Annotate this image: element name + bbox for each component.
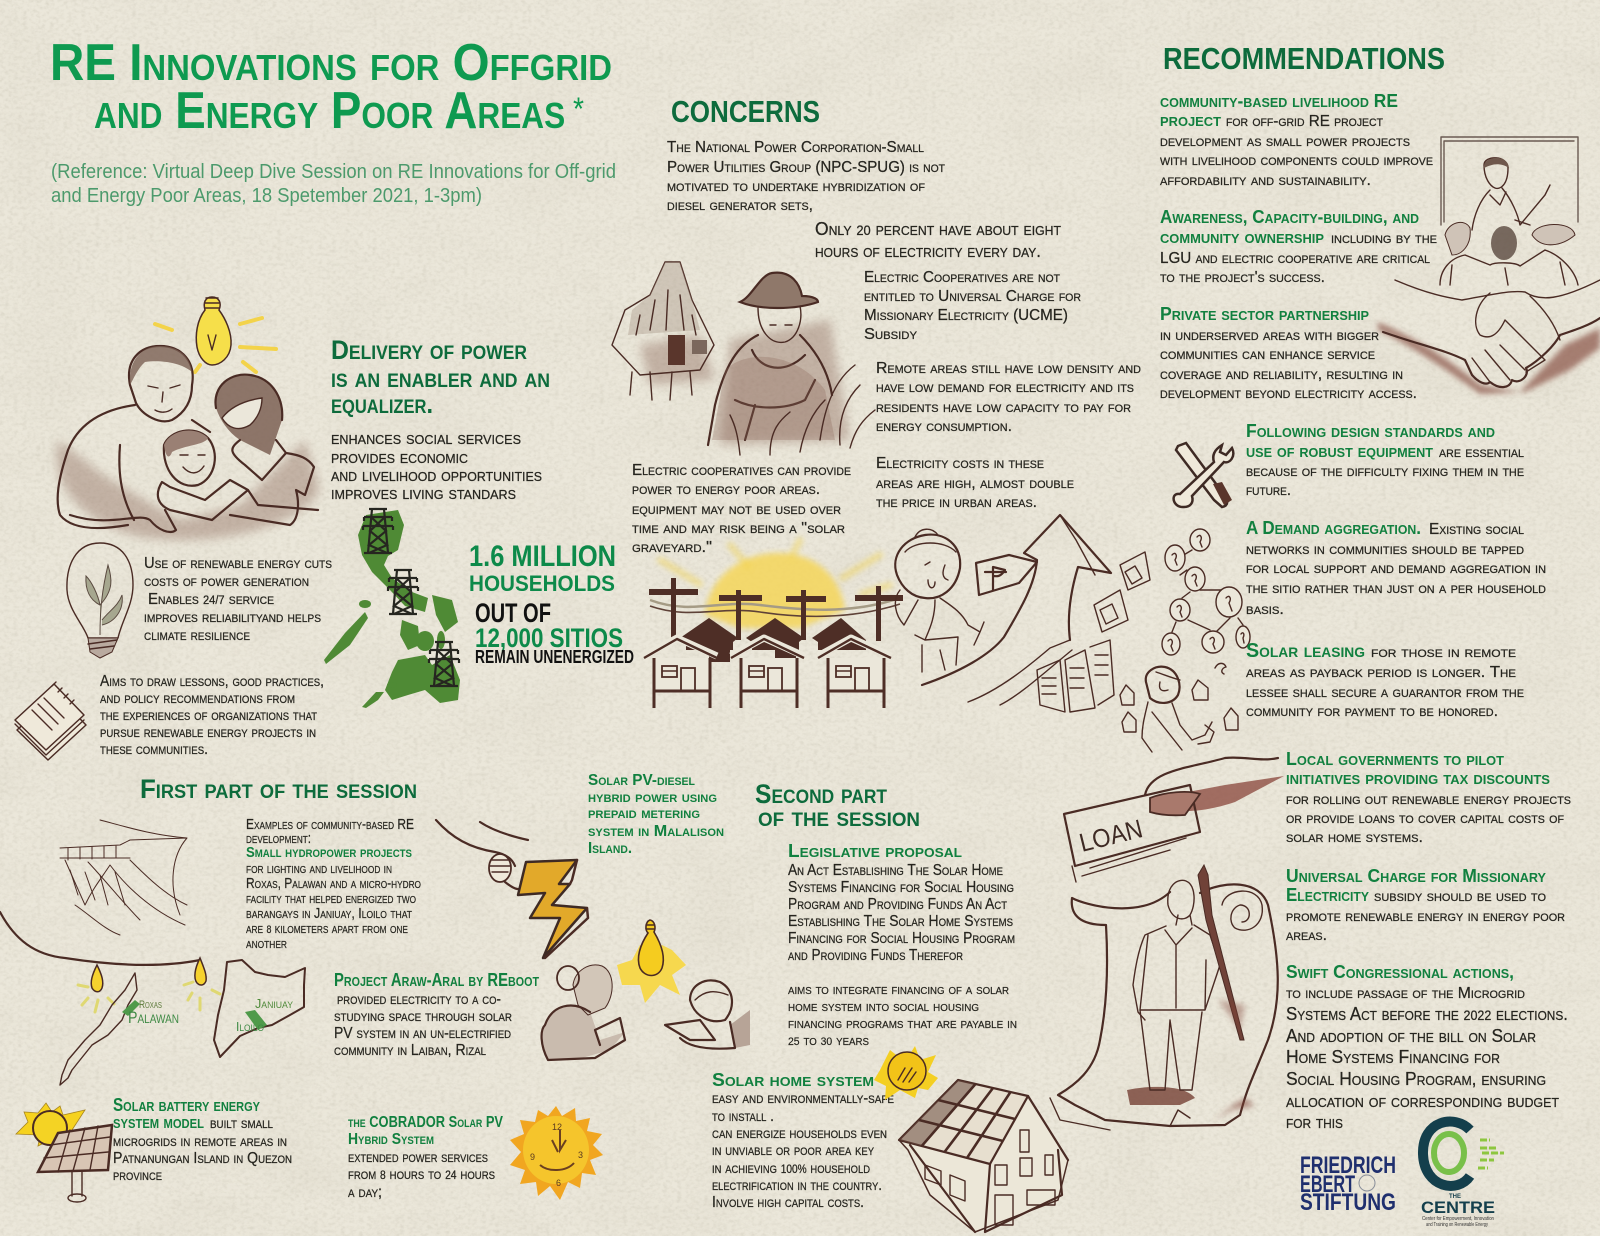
text: COBRADOR solar PV	[348, 1114, 503, 1201]
text: NPC-SPUG concern: The National Power Corporation-Small	[667, 139, 924, 156]
logo: Friedrich Ebert Stiftung: FRIEDRICH	[1300, 1152, 1396, 1179]
recommendation: universal charge: Electricity	[1286, 885, 1369, 905]
man	[1127, 865, 1245, 1105]
recommendation: demand aggregation: Existing social	[1429, 521, 1524, 538]
logo: The Centre	[1421, 1122, 1504, 1228]
text: use of renewable energy	[144, 555, 332, 644]
text: solar battery energy system	[113, 1095, 292, 1184]
map: Palawan: Palawan	[128, 1008, 179, 1027]
recommendation: private sector partnership: communities can enhance service	[1160, 346, 1375, 363]
statistic: households and sitios: 12,000 SITIOS	[475, 623, 623, 653]
text: aims to draw lessons: these communities.	[100, 741, 208, 758]
text: electric cooperatives solar graveyard: Electric cooperatives can provide	[632, 462, 851, 479]
logo: Friedrich Ebert Stiftung: EBERT	[1300, 1171, 1355, 1198]
recommendation: local governments: initiatives providing tax discounts	[1286, 768, 1550, 788]
city buildings	[1037, 552, 1150, 712]
text: examples of community-based RE: Roxas, Palawan and a micro-hydro	[246, 876, 421, 892]
text: legislative proposal: An Act Establishing The Solar Home	[788, 862, 1003, 879]
text: NPC-SPUG concern: diesel generator sets,	[667, 197, 813, 214]
text: aims to draw lessons	[100, 673, 324, 758]
text: use of renewable energy: Use of renewable energy cuts	[144, 555, 332, 572]
text: aims to integrate financing: home system into social housing	[788, 999, 979, 1015]
recommendation: local governments: solar home systems.	[1286, 829, 1423, 846]
text: project Araw-Aral	[334, 970, 539, 1059]
text: examples of community-based RE: development:	[246, 831, 311, 847]
illustration: hydropower dam with bulbs	[0, 820, 220, 1012]
text: solar PV-diesel hybrid: hybrid power using	[588, 789, 717, 806]
text: legislative proposal: Systems Financing for Social Housing	[788, 879, 1014, 896]
recommendation: private sector partnership	[1160, 304, 1417, 402]
child reader left	[542, 965, 625, 1060]
text: aims to integrate financing: 25 to 30 years	[788, 1033, 869, 1049]
logo: The Centre: THE	[1449, 1194, 1461, 1200]
text: solar battery energy system: built small	[210, 1115, 273, 1132]
map: Iloilo	[214, 960, 305, 1057]
recommendation: local governments	[1286, 749, 1571, 846]
text: electricity costs: Electricity costs in these	[876, 455, 1044, 472]
text: examples of community-based RE: barangays in Janiuay, Iloilo that	[246, 906, 412, 922]
recommendation: design standards: because of the difficulty fixing them in the	[1246, 463, 1524, 480]
recommendation: universal charge: subsidy should be used to	[1374, 888, 1546, 905]
recommendation: swift congressional actions: Swift Congressional actions,	[1286, 962, 1514, 982]
illustration: person with thumbs up and houses	[1120, 663, 1238, 752]
recommendation: swift congressional actions: allocation of corresponding budget	[1286, 1090, 1559, 1111]
recommendation: demand aggregation	[1246, 518, 1546, 618]
recommendation: private sector partnership: development beyond electricity access.	[1160, 385, 1417, 402]
text: solar home system description: to install .	[712, 1108, 774, 1125]
recommendation: community-based livelihood: development as small power projects	[1160, 133, 1410, 150]
logo: Friedrich Ebert Stiftung: STIFTUNG	[1300, 1189, 1396, 1216]
title: *	[565, 91, 584, 127]
heading: delivery of power: is an enabler and an	[331, 363, 550, 393]
heading: second part of the session	[755, 779, 920, 832]
text: UCME concern: entitled to Universal Charge for	[864, 288, 1081, 305]
text: legislative proposal: Legislative proposal	[788, 841, 962, 861]
text: benefits list: improves living standars	[331, 482, 516, 503]
text: project Araw-Aral: studying space through solar	[334, 1008, 512, 1025]
text: NPC-SPUG concern	[667, 139, 945, 214]
text: examples of community-based RE: facility that helped energized two	[246, 891, 416, 907]
icon: community network	[1162, 529, 1250, 655]
text: electricity costs: the price in urban areas.	[876, 494, 1037, 511]
recommendation: universal charge	[1286, 866, 1565, 944]
recommendation: local governments: or provide loans to cover capital costs of	[1286, 810, 1564, 827]
text: legislative proposal: Program and Providing Funds An Act	[788, 896, 1007, 913]
text: legislative proposal	[788, 841, 1015, 964]
text: remote areas	[876, 360, 1141, 435]
text: solar battery energy system: microgrids in remote areas in	[113, 1133, 287, 1150]
text: legislative proposal: Establishing The Solar Home Systems	[788, 913, 1013, 930]
heading: delivery of power: equalizer.	[331, 389, 433, 419]
recommendation: universal charge: areas.	[1286, 927, 1327, 944]
text: solar home system description	[712, 1090, 894, 1211]
recommendation: solar leasing: Solar leasing	[1246, 640, 1365, 662]
illustration: hand with coin and lightning bolt	[436, 820, 588, 958]
child reader right	[665, 981, 750, 1049]
recommendation: design standards: Following design standards and	[1246, 421, 1495, 441]
recommendation: private sector partnership: coverage and reliability, resulting in	[1160, 366, 1403, 383]
recommendation: design standards: are essential	[1439, 444, 1524, 461]
text: remote areas: residents have low capacity to pay for	[876, 399, 1131, 416]
text: COBRADOR solar PV: Hybrid System	[348, 1131, 434, 1148]
recommendation: solar leasing: community for payment to be honored.	[1246, 703, 1498, 720]
text: benefits list: and livelihood opportunities	[331, 464, 542, 485]
icon: light bulb	[155, 297, 276, 372]
icon: solar panel with sun	[16, 1103, 112, 1202]
text: use of renewable energy: climate resilience	[144, 627, 250, 644]
text: use of renewable energy: Enables 24/7 service	[148, 591, 274, 608]
recommendation: swift congressional actions: Systems Act before the 2022 elections.	[1286, 1003, 1568, 1024]
recommendation: demand aggregation: networks in communities should be tapped	[1246, 541, 1524, 558]
text: examples of community-based RE	[246, 817, 421, 952]
text: only 20 percent: hours of electricity every day.	[815, 240, 1041, 261]
recommendation: community-based livelihood: for off-grid RE project	[1226, 113, 1383, 130]
text: NPC-SPUG concern: Power Utilities Group (NPC-SPUG) is not	[667, 159, 945, 176]
text: examples of community-based RE: Examples of community-based RE	[246, 817, 414, 833]
text: project Araw-Aral: PV system in an un-electrified	[334, 1025, 511, 1042]
text: project Araw-Aral: Project Araw-Aral by REboot	[334, 970, 539, 990]
illustration: family reading under light bulb	[57, 297, 320, 540]
logo: The Centre: CENTRE	[1421, 1198, 1495, 1217]
text: COBRADOR solar PV: extended power services	[348, 1149, 488, 1166]
recommendation: swift congressional actions: And adoption of the bill on Solar	[1286, 1025, 1536, 1046]
recommendation: solar leasing: lessee shall secure a guarantor from the	[1246, 684, 1524, 701]
recommendation: solar leasing	[1246, 640, 1524, 720]
recommendation: community-based livelihood: with livelihood components could improve	[1160, 152, 1433, 169]
heading: solar home system: Solar home system	[712, 1070, 874, 1090]
text: solar PV-diesel hybrid: prepaid metering	[588, 805, 700, 822]
text: solar home system description: electrification in the country.	[712, 1177, 882, 1194]
text: use of renewable energy: costs of power generation	[144, 573, 309, 590]
text: remote areas: Remote areas still have low density and	[876, 360, 1141, 377]
icon: sun clock	[510, 1106, 603, 1200]
text: UCME concern: Electric Cooperatives are not	[864, 269, 1060, 286]
heading: concerns: CONCERNS	[671, 94, 820, 129]
text: aims to integrate financing: aims to integrate financing of a solar	[788, 982, 1009, 998]
text: COBRADOR solar PV: from 8 hours to 24 hours	[348, 1166, 495, 1183]
text: electricity costs	[876, 455, 1074, 511]
illustration: man with paintbrush and scroll	[1050, 865, 1278, 1130]
text: benefits list: provides economic	[331, 446, 468, 467]
recommendation: design standards: use of robust equipment	[1246, 441, 1433, 461]
text: solar battery energy system: province	[113, 1167, 162, 1184]
text: solar home system description: Involve high capital costs.	[712, 1194, 864, 1211]
scroll	[1050, 884, 1278, 1130]
price tag	[976, 555, 1037, 595]
text: UCME concern: Missionary Electricity (UCME)	[864, 307, 1068, 324]
text: solar PV-diesel hybrid: Island.	[588, 840, 632, 857]
icon: sun clock: 6	[556, 1178, 561, 1188]
title: and Energy Poor Areas	[94, 82, 630, 140]
recommendation: swift congressional actions: Home Systems Financing for	[1286, 1046, 1500, 1067]
man with hat	[895, 529, 984, 672]
text: COBRADOR solar PV: the COBRADOR Solar PV	[348, 1114, 503, 1131]
heading: second part of the session: of the session	[758, 802, 920, 832]
map: Palawan: Roxas	[139, 999, 162, 1011]
text: solar battery energy system: Patnanungan Island in Quezon	[113, 1150, 292, 1167]
text: only 20 percent: Only 20 percent have about eight	[815, 218, 1061, 239]
text: NPC-SPUG concern: motivated to undertake hybridization of	[667, 178, 925, 195]
illustration: community meeting	[1440, 137, 1578, 285]
text: legislative proposal: and Providing Funds Therefor	[788, 947, 963, 964]
icon: sun clock: 9	[530, 1152, 535, 1162]
arrow	[922, 515, 1111, 685]
farmer	[708, 273, 875, 455]
text: project Araw-Aral: community in Laiban, Rizal	[334, 1042, 486, 1059]
recommendation: demand aggregation: A Demand aggregation.	[1246, 518, 1421, 538]
statistic: households and sitios: HOUSEHOLDS	[469, 571, 615, 596]
recommendation: universal charge: Universal Charge for Missionary	[1286, 866, 1546, 886]
logo: The Centre: and Training on Renewable Energy	[1426, 1222, 1488, 1228]
recommendation: demand aggregation: the sitio rather than just on a per household	[1246, 580, 1546, 597]
title	[50, 34, 612, 140]
text: electric cooperatives solar graveyard: equipment may not be used over	[632, 501, 841, 518]
illustration: man and rising price arrow	[895, 515, 1150, 712]
statistic: households and sitios	[469, 540, 634, 667]
icon: sun clock: 3	[578, 1150, 583, 1160]
recommendation: awareness and capacity-building: including by the	[1331, 230, 1437, 247]
text: use of renewable energy: improves reliabilityand helps	[144, 609, 321, 626]
illustration: farmer and hut	[612, 262, 875, 455]
recommendation: private sector partnership: Private sector partnership	[1160, 304, 1369, 324]
recommendation: local governments: Local governments to pilot	[1286, 749, 1504, 769]
text: electric cooperatives solar graveyard: graveyard."	[632, 539, 712, 556]
recommendation: swift congressional actions: for this	[1286, 1111, 1343, 1132]
text: solar PV-diesel hybrid	[588, 772, 724, 857]
reference note	[51, 161, 616, 207]
heading: delivery of power	[331, 335, 550, 419]
text: examples of community-based RE: are 8 kilometers apart from one	[246, 921, 408, 937]
text: solar battery energy system: Solar battery energy	[113, 1095, 260, 1115]
recommendation: design standards	[1246, 421, 1524, 499]
text: solar PV-diesel hybrid: system in Malalison	[588, 823, 724, 840]
text: UCME concern: Subsidy	[864, 326, 918, 343]
text: examples of community-based RE: for lighting and livelihood in	[246, 861, 392, 877]
text: aims to draw lessons: the experiences of organizations that	[100, 707, 317, 724]
text: UCME concern	[864, 269, 1081, 343]
recommendation: demand aggregation: for local support and demand aggregation in	[1246, 560, 1546, 577]
text: COBRADOR solar PV: a day;	[348, 1184, 382, 1201]
map: Palawan	[60, 973, 179, 1085]
recommendation: community-based livelihood	[1160, 91, 1433, 189]
recommendation: universal charge: promote renewable energy in energy poor	[1286, 908, 1565, 925]
text: benefits list	[331, 427, 542, 503]
illustration: house with solar roof	[899, 1080, 1068, 1232]
statistic: households and sitios: OUT OF	[475, 598, 551, 628]
statistic: households and sitios: REMAIN UNENERGIZED	[475, 647, 634, 667]
text: remote areas: energy consumption.	[876, 418, 1012, 435]
heading: second part of the session: Second part	[755, 779, 887, 809]
recommendation: community-based livelihood: affordability and sustainability.	[1160, 172, 1371, 189]
title: RE Innovations for Offgrid	[50, 34, 612, 92]
text: electric cooperatives solar graveyard: power to energy poor areas.	[632, 481, 820, 498]
recommendation: awareness and capacity-building: to the project's success.	[1160, 269, 1325, 286]
text: examples of community-based RE: Small hydropower projects	[246, 844, 412, 861]
recommendation: solar leasing: for those in remote	[1371, 644, 1516, 661]
text: solar home system description: easy and environmentally-safe	[712, 1090, 894, 1107]
text: solar home system description: in unviable or poor area key	[712, 1142, 875, 1159]
illustration: children reading under bulb	[542, 920, 750, 1060]
map: Iloilo: Iloilo	[236, 1019, 264, 1034]
recommendation: local governments: for rolling out renewable energy projects	[1286, 791, 1571, 808]
hut	[612, 262, 714, 400]
text: aims to integrate financing	[788, 982, 1017, 1049]
map: Iloilo: Janiuay	[255, 996, 293, 1011]
recommendation: awareness and capacity-building: LGU and electric cooperative are critical	[1160, 250, 1430, 267]
icon: wrench and screwdriver	[1174, 443, 1233, 507]
recommendation: private sector partnership: in underserved areas with bigger	[1160, 327, 1379, 344]
heading: recommendations: RECOMMENDATIONS	[1163, 41, 1445, 76]
recommendation: awareness and capacity-building	[1160, 207, 1437, 286]
icon: notepad	[15, 682, 86, 760]
heading: delivery of power: Delivery of power	[331, 335, 527, 365]
text: remote areas: have low demand for electricity and its	[876, 379, 1134, 396]
heading: first part of the session: First part of the session	[140, 774, 417, 804]
map: Philippines with transmission towers	[324, 509, 460, 708]
statistic: households and sitios: 1.6 MILLION	[469, 540, 616, 573]
logo: Friedrich Ebert Stiftung	[1300, 1152, 1396, 1216]
text: electric cooperatives solar graveyard	[632, 462, 851, 556]
illustration: hand holding loan note	[1064, 758, 1284, 882]
text: aims to integrate financing: financing programs that are payable in	[788, 1016, 1017, 1032]
text: only 20 percent	[815, 218, 1061, 261]
reference note: (Reference: Virtual Deep Dive Session on RE Innovations for Off-grid	[51, 161, 616, 183]
recommendation: awareness and capacity-building: community ownership	[1160, 227, 1324, 247]
text: solar PV-diesel hybrid: Solar PV-diesel	[588, 772, 695, 789]
text: examples of community-based RE: another	[246, 936, 287, 952]
recommendation: solar leasing: areas as payback period is longer. The	[1246, 664, 1516, 681]
recommendation: community-based livelihood: project	[1160, 110, 1221, 130]
illustration: handshake	[1378, 280, 1600, 394]
recommendation: swift congressional actions: Social Housing Program, ensuring	[1286, 1068, 1546, 1089]
recommendation: community-based livelihood: community-based livelihood RE	[1160, 91, 1398, 111]
text: aims to draw lessons: pursue renewable energy projects in	[100, 724, 316, 741]
recommendation: swift congressional actions: to include passage of the Microgrid	[1286, 985, 1525, 1002]
illustration: sun, power poles and houses	[644, 540, 903, 708]
icon: sun clock: 12	[552, 1122, 562, 1132]
text: aims to draw lessons: Aims to draw lessons, good practices,	[100, 673, 324, 690]
text: electricity costs: areas are high, almost double	[876, 475, 1074, 492]
icon: plant in bulb	[67, 543, 133, 658]
text: solar home system description: in achieving 100% household	[712, 1160, 870, 1177]
text: project Araw-Aral: provided electricity to a co-	[337, 991, 501, 1008]
recommendation: awareness and capacity-building: Awareness, Capacity-building, and	[1160, 207, 1419, 227]
recommendation: design standards: future.	[1246, 482, 1291, 499]
text: benefits list: enhances social services	[331, 427, 521, 448]
text: solar battery energy system: system model	[113, 1112, 204, 1132]
text: aims to draw lessons: and policy recommendations from	[100, 690, 295, 707]
text: legislative proposal: Financing for Social Housing Program	[788, 930, 1015, 947]
recommendation: swift congressional actions	[1286, 962, 1568, 1132]
illustration: hand holding loan note: LOAN	[1076, 813, 1146, 858]
logo: The Centre: Center for Empowerment, Innovation	[1422, 1216, 1494, 1222]
icon: small sun	[874, 1046, 938, 1100]
text: solar home system description: can energize households even	[712, 1125, 887, 1142]
reference note: and Energy Poor Areas, 18 Spetember 2021, 1-3pm)	[51, 185, 482, 207]
text: electric cooperatives solar graveyard: time and may risk being a "solar	[632, 520, 845, 537]
recommendation: demand aggregation: basis.	[1246, 601, 1284, 618]
